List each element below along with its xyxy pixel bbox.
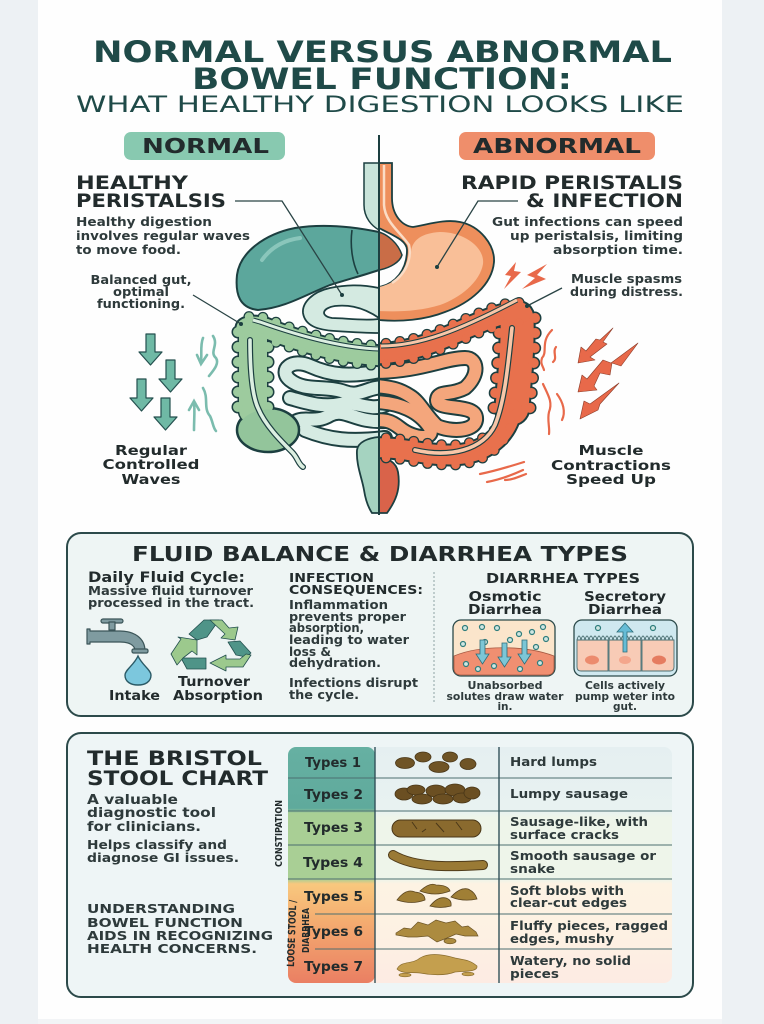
conclusion text [87, 901, 273, 956]
icon: faucet [87, 619, 148, 653]
chart description: diagnostic tool [87, 806, 216, 821]
axis label: constipation: CONSTIPATION [274, 800, 285, 867]
osmotic heading [468, 589, 542, 618]
stomach abnormal half [379, 163, 494, 321]
icon: green down arrows [130, 334, 182, 430]
description labels: surface cracks [510, 827, 619, 842]
center divider line [378, 135, 380, 515]
type labels: Types 4 [303, 855, 363, 871]
chart description: Helps classify and [87, 837, 227, 852]
description labels: edges, mushy [510, 931, 614, 946]
secretory heading: Secretory [584, 589, 666, 605]
type labels: Types 2 [304, 787, 363, 803]
stool type 4 [393, 855, 483, 866]
axis label: loose stool / diarrhea: LOOSE STOOL / [286, 899, 299, 967]
callout: balanced gut [90, 273, 192, 311]
daily fluid cycle text [88, 570, 254, 610]
right block: rapid peristalis [461, 173, 683, 257]
right block: rapid peristalis: & INFECTION [526, 191, 683, 212]
infection consequences text: INFECTION [289, 570, 374, 585]
leader: peristalsis [235, 201, 344, 297]
osmotic caption: in. [497, 701, 513, 713]
secretory caption: Cells actively [585, 680, 665, 692]
left block: healthy peristalsis: HEALTHY [76, 173, 189, 194]
label: regular controlled waves: Regular [115, 443, 187, 459]
leader: spasms [525, 288, 562, 308]
title: WHAT HEALTHY DIGESTION LOOKS LIKE [76, 93, 684, 118]
chart heading [87, 747, 269, 790]
conclusion text: AIDS IN RECOGNIZING [87, 928, 273, 943]
label: muscle contractions speed up: Speed Up [566, 472, 656, 488]
secretory caption [575, 680, 675, 713]
small intestine normal [286, 363, 385, 440]
osmotic caption [446, 680, 564, 713]
callout: muscle spasms: during distress. [570, 285, 683, 299]
abnormal badge: ABNORMAL [473, 134, 641, 158]
icon: secretory diagram [574, 620, 677, 676]
infection consequences text: CONSEQUENCES: [289, 582, 423, 597]
axis label: loose stool / diarrhea [286, 899, 312, 967]
diarrhea types heading: DIARRHEA TYPES [486, 572, 640, 587]
description labels: Watery, no solid [510, 953, 631, 968]
secretory heading: Diarrhea [588, 602, 662, 618]
type labels: Types 1 [305, 755, 361, 771]
icon labels: intake, turnover, absorption [109, 675, 263, 704]
chart description: A valuable [87, 793, 178, 808]
infection consequences text: prevents proper [289, 610, 406, 624]
daily fluid cycle text: processed in the tract. [88, 596, 254, 610]
left block: healthy peristalsis [76, 173, 250, 257]
description labels: snake [510, 861, 555, 876]
small intestine abnormal [372, 358, 476, 437]
osmotic caption: solutes draw water [446, 691, 564, 703]
label: regular controlled waves: Waves [122, 472, 180, 488]
conclusion text: UNDERSTANDING [87, 901, 235, 916]
icon: spasm sparks [504, 262, 547, 289]
label: muscle contractions speed up: Contractions [551, 458, 671, 474]
title [76, 35, 684, 118]
infection consequences text: Inflammation [289, 598, 388, 612]
title: NORMAL VERSUS ABNORMAL [93, 35, 672, 69]
chart description: for clinicians. [87, 820, 201, 835]
normal badge [124, 132, 285, 160]
rectum [357, 437, 399, 513]
stool type 5 [397, 884, 477, 908]
label: muscle contractions speed up [551, 443, 671, 488]
chart heading: THE BRISTOL [87, 747, 262, 770]
callout: balanced gut: optimal [113, 285, 169, 299]
icon labels: intake, turnover, absorption: Intake [109, 689, 160, 704]
type labels: Types 3 [304, 820, 363, 836]
osmotic heading: Diarrhea [468, 602, 542, 618]
chart heading: STOOL CHART [87, 767, 269, 790]
stool type 2 [395, 784, 480, 804]
description labels [510, 754, 668, 981]
colon abnormal [372, 300, 535, 465]
icon: teal motion waves [189, 336, 217, 431]
secretory caption: gut. [613, 701, 637, 713]
infection consequences text: absorption, [289, 621, 364, 635]
infection consequences text: dehydration. [289, 656, 381, 670]
conclusion text: BOWEL FUNCTION [87, 915, 243, 930]
label: muscle contractions speed up: Muscle [578, 443, 644, 459]
description labels: Soft blobs with [510, 883, 624, 898]
label: regular controlled waves [102, 443, 200, 488]
type labels: Types 5 [304, 889, 363, 905]
digestive system diagram [237, 163, 535, 513]
daily fluid cycle text: Daily Fluid Cycle: [88, 570, 245, 586]
abnormal badge [459, 132, 655, 160]
description labels: pieces [510, 966, 559, 981]
secretory heading [584, 589, 666, 618]
stool type 1 [396, 752, 476, 772]
conclusion text: HEALTH CONCERNS. [87, 941, 257, 956]
type labels: Types 7 [304, 959, 363, 975]
esophagus normal half [364, 163, 379, 230]
colon normal [237, 316, 385, 467]
panel: fluid balance [67, 533, 693, 716]
description labels: Smooth sausage or [510, 848, 657, 863]
left block: healthy peristalsis: to move food. [76, 242, 181, 257]
description labels: Lumpy sausage [510, 786, 628, 801]
right block: rapid peristalis: RAPID PERISTALIS [461, 173, 683, 194]
panel heading: FLUID BALANCE & DIARRHEA TYPES [132, 542, 628, 566]
stool type 3 [392, 820, 481, 837]
description labels: Hard lumps [510, 754, 597, 769]
liver [237, 226, 402, 310]
icon: orange lightning arrows [578, 328, 638, 419]
left block: healthy peristalsis: Healthy digestion [76, 214, 212, 229]
label: regular controlled waves: Controlled [102, 457, 200, 473]
icon labels: intake, turnover, absorption: Absorption [173, 689, 263, 704]
icon: orange motion waves [480, 330, 564, 482]
icon labels: intake, turnover, absorption: Turnover [178, 675, 251, 690]
icon: recycle arrows [171, 620, 251, 671]
callout: balanced gut: Balanced gut, [90, 273, 192, 287]
right block: rapid peristalis: Gut infections can speed [492, 214, 683, 229]
description labels: clear-cut edges [510, 895, 627, 910]
description labels: Sausage-like, with [510, 814, 648, 829]
left block: healthy peristalsis: PERISTALSIS [76, 191, 226, 212]
daily fluid cycle text: Massive fluid turnover [88, 584, 253, 598]
right block: rapid peristalis: up peristalsis, limiting [510, 228, 683, 243]
leader: balanced gut [193, 295, 243, 326]
title: BOWEL FUNCTION: [192, 62, 572, 96]
infection consequences text [289, 570, 423, 702]
leader: stomach [435, 201, 518, 269]
callout: muscle spasms: Muscle spasms [571, 272, 682, 286]
normal badge: NORMAL [142, 134, 269, 158]
chart description [87, 793, 239, 865]
infection consequences text: loss & [289, 645, 331, 659]
icon: water drop [125, 656, 151, 685]
icon: osmotic diagram [453, 620, 555, 676]
stomach normal half [303, 285, 379, 333]
left block: healthy peristalsis: involves regular waves [76, 228, 250, 243]
osmotic caption: Unabsorbed [468, 680, 542, 692]
stool type 7 [397, 955, 477, 977]
secretory caption: pump weter into [575, 691, 675, 703]
chart description: diagnose GI issues. [87, 850, 239, 865]
infection consequences text: the cycle. [289, 688, 359, 702]
axis label: loose stool / diarrhea: DIARRHEA [301, 908, 312, 953]
callout: muscle spasms [570, 272, 683, 299]
stool table [274, 747, 672, 983]
type labels [303, 755, 363, 975]
infection consequences text: leading to water [289, 633, 409, 647]
type labels: Types 6 [304, 924, 363, 940]
right block: rapid peristalis: absorption time. [553, 242, 683, 257]
description labels: Fluffy pieces, ragged [510, 918, 668, 933]
callout: balanced gut: functioning. [97, 297, 185, 311]
osmotic heading: Osmotic [468, 589, 542, 605]
infection consequences text: Infections disrupt [289, 676, 418, 690]
panel: bristol stool chart [67, 733, 693, 997]
stool type 6 [396, 920, 478, 944]
